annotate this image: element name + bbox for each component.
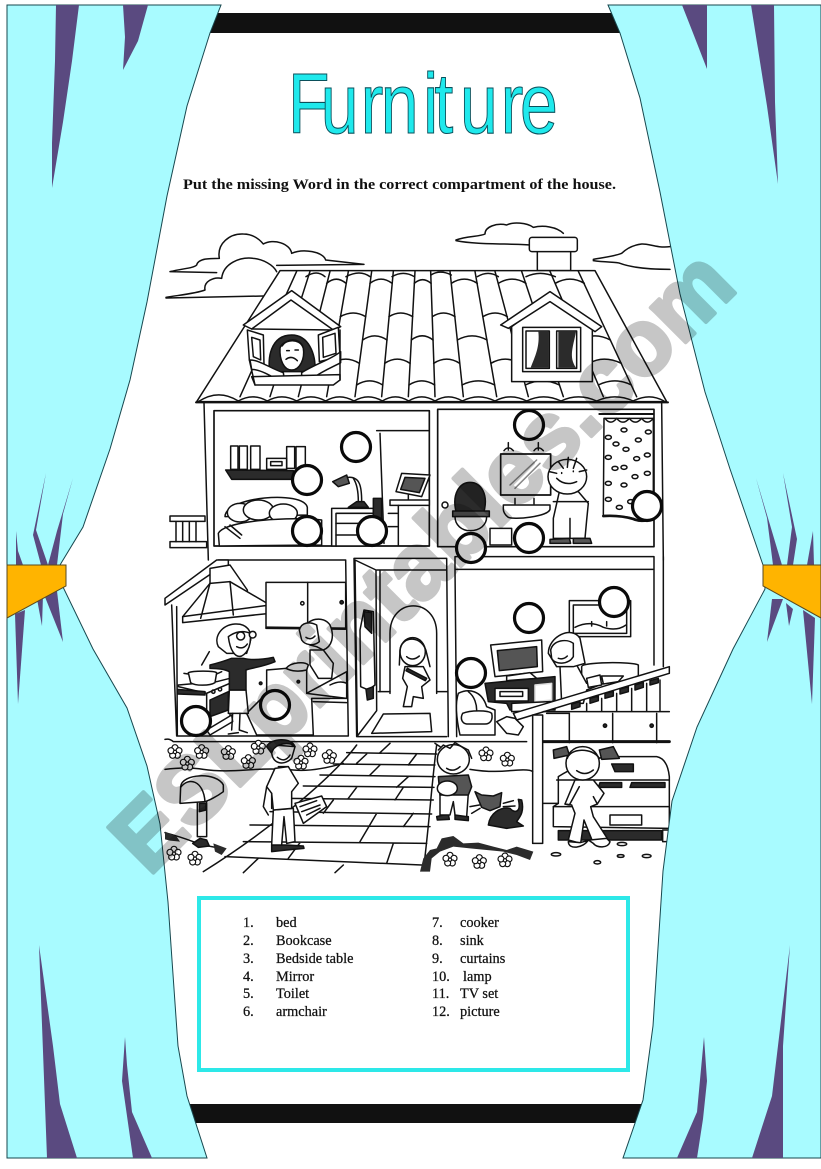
flowers (167, 740, 514, 868)
sink (503, 498, 550, 518)
curtain folds (15, 5, 152, 1158)
cooker (177, 671, 233, 735)
living room (455, 557, 663, 737)
TV set (485, 640, 555, 712)
coat (360, 610, 375, 700)
bed (218, 497, 322, 546)
word list box: 8. (432, 933, 443, 949)
desk and monitor (388, 473, 430, 545)
door mat (372, 713, 432, 733)
clouds (166, 223, 670, 298)
word list box: bed (276, 915, 297, 931)
sofa (582, 663, 638, 697)
word list box: 1. (243, 915, 254, 931)
mailbox (180, 776, 223, 847)
word list box: armchair (276, 1004, 327, 1020)
armchair (457, 691, 495, 735)
word list box: TV set (460, 986, 498, 1002)
hallway (354, 558, 448, 737)
word list box: Bookcase (276, 933, 332, 949)
curtain (599, 414, 653, 521)
toilet (442, 482, 512, 545)
curtain folds (677, 5, 815, 1158)
word list box: 5. (243, 986, 254, 1002)
garden bushes (165, 832, 533, 872)
lamp (333, 475, 368, 507)
word list box (199, 898, 628, 1070)
title: Furniture (288, 57, 558, 152)
house illustration upper: clouds, roof, upper rooms (166, 223, 670, 560)
range hood (183, 565, 270, 623)
car (543, 757, 669, 864)
word list box: Mirror (276, 969, 314, 985)
cat (470, 792, 523, 828)
right dormer with window (501, 292, 602, 382)
bedside table (332, 498, 382, 546)
instruction text: Put the missing Word in the correct compartment of the house. (183, 176, 616, 193)
wall cabinets (266, 582, 346, 629)
word list box: picture (460, 1004, 500, 1020)
right curtain (608, 5, 821, 1158)
woman on sofa (548, 633, 623, 703)
picture on wall (569, 601, 631, 637)
word list box: 12. (432, 1004, 450, 1020)
mirror (501, 443, 551, 495)
word list box: Bedside table (276, 951, 353, 967)
left curtain (7, 5, 221, 1158)
woman cooking (202, 624, 275, 734)
potted plant (497, 717, 523, 735)
word list box: 3. (243, 951, 254, 967)
boy brushing teeth (548, 457, 592, 543)
bookshelf (226, 446, 305, 479)
bottom black bar (180, 1104, 650, 1123)
word list box: 6. (243, 1004, 254, 1020)
left dormer with woman (243, 291, 341, 385)
woman with bowl (286, 619, 333, 678)
word list box: 10. (432, 969, 450, 985)
garden path (203, 743, 437, 873)
balcony (170, 516, 207, 548)
curtain tie (763, 565, 821, 618)
word list box: cooker (460, 915, 499, 931)
girl with pigtails (553, 747, 619, 847)
word list box: 9. (432, 951, 443, 967)
watermark: ESLprintables.com (90, 230, 753, 891)
word list box: 11. (432, 986, 449, 1002)
word list box: 2. (243, 933, 254, 949)
bathroom (438, 409, 654, 547)
house illustration lower: ground floor, garden and garage (165, 557, 669, 873)
word list box: Toilet (276, 986, 309, 1002)
curtain tie (7, 565, 66, 618)
roof (196, 271, 668, 402)
garage roof and stair rail (513, 667, 669, 843)
word list box: lamp (463, 969, 492, 985)
word list box: curtains (460, 951, 506, 967)
word list box: 7. (432, 915, 443, 931)
kitchen counters (247, 667, 347, 735)
boy with ball (435, 743, 472, 821)
label circles: numbered answer spots (182, 410, 662, 736)
girl running (399, 638, 430, 707)
word list box: sink (460, 933, 485, 949)
word list box: 4. (243, 969, 254, 985)
study doorway (377, 431, 428, 543)
man with newspaper (263, 740, 327, 852)
bedroom (214, 411, 430, 546)
chimney (529, 237, 577, 271)
kitchen (165, 560, 348, 736)
top black bar (205, 13, 625, 33)
exterior walls (204, 403, 663, 560)
ground lines (165, 739, 533, 848)
